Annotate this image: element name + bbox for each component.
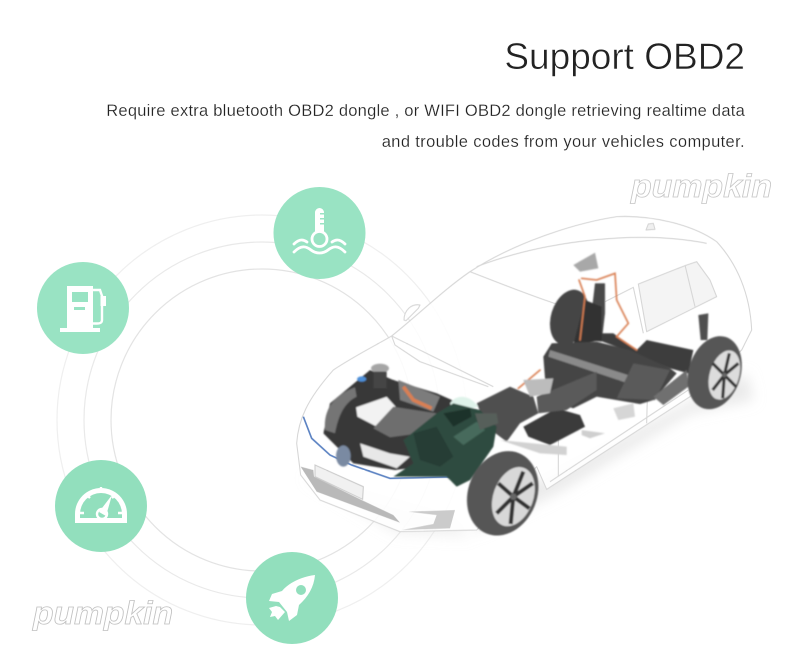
description line 1: Require extra bluetooth OBD2 dongle , or WIFI OBD2 dongle retrieving realtime data — [106, 102, 745, 120]
front right wheel — [455, 440, 551, 546]
logo: pumpkin bottom left: pumpkin — [32, 595, 173, 631]
engine bay — [323, 364, 467, 470]
icon: rocket — [246, 552, 338, 644]
concentric rings — [57, 215, 467, 625]
description line 2: and trouble codes from your vehicles computer. — [382, 133, 745, 151]
car shadow — [303, 373, 753, 537]
front bumper and grille — [301, 417, 460, 530]
icon: speedometer gauge — [55, 460, 147, 552]
car illustration — [297, 216, 753, 546]
traction battery pack — [477, 342, 688, 455]
logo: pumpkin top right: pumpkin — [630, 168, 772, 204]
rear left wheel — [544, 285, 602, 350]
title: Support OBD2 — [504, 36, 745, 77]
orange high-voltage cable — [518, 273, 637, 388]
chassis and mechanical parts — [323, 253, 750, 546]
icon: coolant temperature — [274, 187, 366, 279]
rear right wheel — [679, 329, 750, 416]
icon: fuel pump — [37, 262, 129, 354]
green highlighted section — [393, 397, 498, 487]
rear suspension and strut — [573, 253, 708, 373]
car body shell — [297, 216, 752, 532]
